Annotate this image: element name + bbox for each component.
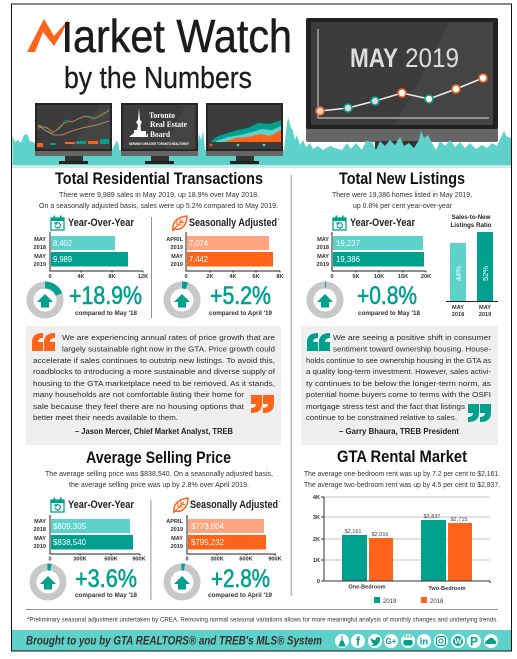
summary text: up 0.8% per cent year-over-year <box>353 201 452 210</box>
panel: average selling price <box>32 448 282 600</box>
sales-to-new listings ratio chart: MAY <box>452 305 464 311</box>
year-over-year bar chart: 2019 <box>34 544 46 550</box>
donut: +5.2%: +5.2% <box>210 282 271 310</box>
seasonally adjusted bar chart: 6K <box>252 274 260 280</box>
footer text: Brought to you by GTA REALTORS® and TREB's MLS® System <box>26 634 322 648</box>
footer band <box>12 630 511 650</box>
quote text: a quality long-term investment. However, sales activi- <box>306 367 491 376</box>
summary text: The average selling price was $838,540. On a seasonally adjusted basis, <box>45 469 273 478</box>
quote text: many households are not comfortable listing their home for <box>33 390 244 399</box>
year-over-year bar chart <box>34 216 148 280</box>
icon: opening quote <box>307 333 330 351</box>
seasonally adjusted bar chart: 0 <box>185 556 189 562</box>
year-over-year bar chart: 600K <box>104 556 118 562</box>
inner divider <box>150 217 153 318</box>
donut: +2.8% <box>166 565 273 599</box>
seasonally adjusted bar chart: 2019 <box>171 245 183 251</box>
year-over-year bar chart: MAY <box>34 237 46 243</box>
year-over-year bar chart: 300K <box>73 556 87 562</box>
year-over-year bar chart: MAY <box>34 254 46 260</box>
quote text: potential home buyers come to terms with the OSFI <box>306 390 491 399</box>
quote text: roadblocks to introducing a more sustainable and diverse supply of <box>33 367 276 376</box>
year-over-year bar chart: 15K <box>398 274 408 280</box>
year-over-year bar chart: 2018 <box>34 527 46 533</box>
donut: +18.9%: compared to May '18 <box>75 311 138 317</box>
seasonally adjusted bar chart: 0 <box>184 274 188 280</box>
heading: GTA Rental Market <box>337 447 467 466</box>
rental bar chart: $2,016 <box>371 532 389 538</box>
donut: +0.8% <box>310 282 421 317</box>
year-over-year bar chart: Year-Over-Year <box>350 217 416 229</box>
summary text: the average selling price was up by 2.8% over April 2019. <box>69 480 249 489</box>
line chart <box>316 74 487 115</box>
seasonally adjusted bar chart: APRIL <box>166 237 184 243</box>
attribution: – Jason Mercer, Chief Market Analyst, TREB <box>75 427 233 436</box>
year-over-year bar chart <box>317 216 431 280</box>
title line one: arket Watch <box>73 10 292 62</box>
quote text: largely sustainable right now in the GTA. Price growth could <box>62 344 275 353</box>
quote text: housing to the GTA marketplace need to be removed. As it stands, <box>33 379 275 388</box>
summary text <box>45 469 273 489</box>
seasonally adjusted bar chart: 900K <box>268 556 282 562</box>
year-over-year bar chart: 2019 <box>317 262 329 268</box>
icon: opening quote <box>32 333 55 351</box>
summary text: The average one-bedroom rent was up by 7.2 per cent to $2,161. <box>304 469 500 478</box>
seasonally adjusted bar chart: 7,442 <box>189 255 209 264</box>
seasonally adjusted bar chart: 8K <box>276 274 284 280</box>
donut: +3.6% <box>32 565 138 599</box>
sales-to-new listings ratio chart <box>446 214 498 318</box>
sales-to-new listings ratio chart: MAY <box>479 305 491 311</box>
footnote: *Preliminary seasonal adjustment undertaken by CREA. Removing normal seasonal variations allows for more meaningful analysis of monthly changes and underlying trends. <box>27 616 498 624</box>
summary text: The average two-bedroom rent was up by 4.5 per cent to $2,837. <box>304 480 500 489</box>
icon: leaf <box>173 498 188 513</box>
year-over-year bar chart: 10K <box>374 274 384 280</box>
social icons: f <box>356 634 361 648</box>
quote text: accelerate if sales continues to outstrip new listings. To avoid this, <box>33 356 275 365</box>
title M stem <box>65 22 70 52</box>
seasonally adjusted bar chart: APRIL <box>166 519 184 525</box>
donut: +5.2%: compared to April '19 <box>209 311 273 317</box>
donut: +3.6%: +3.6% <box>75 565 137 593</box>
logo text <box>149 111 187 139</box>
seasonally adjusted bar chart: * <box>279 499 281 504</box>
rental bar chart: 2K <box>313 537 320 543</box>
seasonally adjusted bar chart: 2019 <box>171 544 183 550</box>
seasonally adjusted bar chart: $773,604 <box>191 522 225 531</box>
quote text: ty continues to be below the longer-term norm, as <box>306 379 491 388</box>
small monitor: stock chart <box>35 103 112 164</box>
icon: calendar <box>51 216 64 230</box>
seasonally adjusted bar chart: 7,074 <box>189 239 209 248</box>
quote text: We are seeing a positive shift in consumer <box>333 333 492 342</box>
year-over-year bar chart: Year-Over-Year <box>68 217 135 229</box>
year-over-year bar chart: Year-Over-Year <box>68 499 135 511</box>
seasonally adjusted bar chart: MAY <box>171 254 183 260</box>
seasonally adjusted bar chart: 2019 <box>171 527 183 533</box>
year-over-year bar chart: 2018 <box>34 245 46 251</box>
quote text: We are experiencing annual rates of price growth that are <box>62 333 275 342</box>
quote text: continue to be constrained relative to sales. <box>306 413 457 422</box>
rental bar chart: $2,837 <box>423 514 441 520</box>
seasonally adjusted bar chart: 2K <box>206 274 214 280</box>
footnote rule <box>26 608 498 611</box>
sales-to-new listings ratio chart: Listings Ratio <box>451 222 492 229</box>
donut: +2.8%: compared to April '19 <box>208 593 273 599</box>
rental bar chart: One-Bedroom <box>348 584 386 590</box>
summary text: On a seasonally adjusted basis, sales were up 5.2% compared to May 2019. <box>39 201 278 210</box>
panel: quote Jason Mercer <box>26 326 281 445</box>
logo text: Real Estate <box>150 120 187 129</box>
year-over-year bar chart: MAY <box>317 254 329 260</box>
panel: quote Garry Bhaura <box>301 326 498 445</box>
rental bar chart: 1K <box>313 558 320 564</box>
panel: GTA rental market <box>304 447 500 605</box>
social icons: P <box>470 634 478 648</box>
small monitor: TREB logo <box>121 103 198 164</box>
heading: Average Selling Price <box>86 448 231 467</box>
heading: Total Residential Transactions <box>55 169 263 188</box>
summary text <box>304 469 500 489</box>
social icons: W <box>454 637 462 646</box>
seasonally adjusted bar chart: 2019 <box>171 262 183 268</box>
icon: calendar <box>51 498 64 512</box>
seasonally adjusted bar chart: 600K <box>239 556 253 562</box>
logo text: Board <box>150 130 171 139</box>
donut: +5.2% <box>167 282 273 317</box>
skyline <box>12 117 511 165</box>
year-over-year bar chart: 9,989 <box>53 255 73 264</box>
year-over-year bar chart: MAY <box>34 536 46 542</box>
chart legend: 2018 <box>430 599 444 605</box>
date text: MAY <box>350 43 398 73</box>
column divider <box>290 175 292 596</box>
year-over-year bar chart: 900K <box>132 556 146 562</box>
year-over-year bar chart: 8,402 <box>53 239 73 248</box>
quote text: mortgage stress test and the fact that listings <box>306 402 465 411</box>
year-over-year bar chart: 19,386 <box>336 255 361 264</box>
rental bar chart: 4K <box>313 495 320 501</box>
icon: closing quote <box>468 404 491 422</box>
icon: closing quote <box>251 395 274 413</box>
social icons <box>335 634 498 648</box>
rental bar chart: $2,715 <box>450 517 468 523</box>
year-over-year bar chart: 4K <box>77 274 85 280</box>
small monitor: area chart <box>206 103 283 164</box>
social icons: G+ <box>386 637 397 646</box>
attribution: – Garry Bhaura, TREB President <box>339 427 459 436</box>
large monitor: May 2019 <box>306 18 498 152</box>
summary text <box>332 190 472 210</box>
year-over-year bar chart: 0 <box>48 556 52 562</box>
seasonally adjusted bar chart: Seasonally Adjusted <box>190 499 278 511</box>
sales-to-new listings ratio chart: 2019 <box>479 312 491 318</box>
icon: leaf <box>172 216 187 231</box>
panel: total residential transactions <box>30 169 284 318</box>
sales-to-new listings ratio chart: 52% <box>481 266 490 281</box>
year-over-year bar chart: MAY <box>317 237 329 243</box>
title line two: by the Numbers <box>64 60 252 95</box>
year-over-year bar chart: 0 <box>48 274 52 280</box>
quote text: sentiment toward ownership housing. House- <box>333 344 491 353</box>
year-over-year bar chart: 20K <box>421 274 431 280</box>
year-over-year bar chart: 19,237 <box>336 239 361 248</box>
quote text <box>306 333 492 422</box>
year-over-year bar chart: 0 <box>330 274 334 280</box>
year-over-year bar chart: $838,540 <box>53 538 87 547</box>
seasonally adjusted bar chart: * <box>278 217 280 222</box>
year-over-year bar chart: MAY <box>34 519 46 525</box>
seasonally adjusted bar chart <box>166 498 282 562</box>
seasonally adjusted bar chart: 4K <box>229 274 237 280</box>
seasonally adjusted bar chart: MAY <box>171 536 183 542</box>
quote text: sale because they feel there are no housing options that <box>33 402 245 411</box>
donut: +0.8%: +0.8% <box>357 282 417 310</box>
seasonally adjusted bar chart: $795,232 <box>191 538 225 547</box>
summary text: There were 9,989 sales in May 2019, up 18.9% over May 2018. <box>59 190 259 199</box>
rental bar chart: $2,161 <box>344 529 362 535</box>
donut: +18.9% <box>30 282 142 317</box>
donut: +0.8%: compared to May '18 <box>358 311 421 317</box>
quote text: better meet their needs available to them. <box>33 413 178 422</box>
quote text: holds continue to see ownership housing in the GTA as <box>306 356 491 365</box>
logo text: Toronto <box>149 111 175 120</box>
quote text <box>33 333 276 422</box>
seasonally adjusted bar chart: Seasonally Adjusted <box>189 217 277 229</box>
chart axes <box>318 29 489 118</box>
sales-to-new listings ratio chart: Sales-to-New <box>452 214 491 221</box>
year-over-year bar chart: 5K <box>352 274 360 280</box>
title <box>27 10 292 95</box>
skyline base strip <box>12 165 511 168</box>
rental bar chart <box>313 495 490 592</box>
rental bar chart: 3K <box>313 515 320 521</box>
rental bar chart: 0 <box>317 579 320 585</box>
summary text: There were 19,386 homes listed in May 2019, <box>332 190 472 199</box>
summary text <box>39 190 278 210</box>
seasonally adjusted bar chart <box>166 216 284 280</box>
rental bar chart: Two-Bedroom <box>428 586 466 592</box>
icon: calendar <box>333 216 346 230</box>
year-over-year bar chart <box>34 498 146 562</box>
year-over-year bar chart: 2019 <box>34 262 46 268</box>
donut: +3.6%: compared to May '18 <box>75 593 138 599</box>
heading: Total New Listings <box>339 169 465 188</box>
small monitor: TREB logo: SERVING GREATER TORONTO REALTORS® <box>129 142 189 146</box>
inner divider <box>150 500 152 600</box>
icon: orange M logo <box>27 19 69 52</box>
year-over-year bar chart: 8K <box>108 274 116 280</box>
year-over-year bar chart: $809,305 <box>53 522 87 531</box>
large monitor: May 2019: 2019 <box>405 43 459 73</box>
year-over-year bar chart: 12K <box>138 274 148 280</box>
year-over-year bar chart: 2018 <box>317 245 329 251</box>
chart legend <box>374 597 444 605</box>
sales-to-new listings ratio chart: 2018 <box>452 312 464 318</box>
seasonally adjusted bar chart: 300K <box>210 556 224 562</box>
icon: CN tower and buildings <box>129 108 148 137</box>
donut: +18.9%: +18.9% <box>69 282 142 310</box>
sales-to-new listings ratio chart: 44% <box>454 266 463 281</box>
chart legend: 2019 <box>383 599 397 605</box>
panel: total new listings <box>310 169 498 318</box>
donut: +2.8%: +2.8% <box>211 565 270 593</box>
social icons: in <box>420 636 428 648</box>
